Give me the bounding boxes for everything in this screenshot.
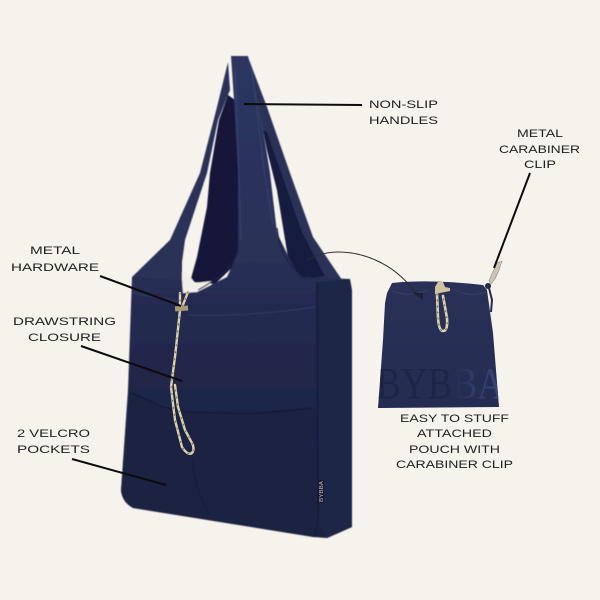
left strap interior dark xyxy=(190,95,242,284)
label: 2 velcro pockets xyxy=(17,428,91,456)
drawstring cord xyxy=(171,292,194,454)
label: easy to stuff pouch: CARABINER CLIP xyxy=(396,459,513,471)
pocket fold xyxy=(192,460,210,515)
pointer: hardware xyxy=(100,276,181,306)
left strap xyxy=(132,62,230,296)
label: metal carabiner clip: CLIP xyxy=(524,159,556,171)
pointer: pockets xyxy=(72,459,166,485)
front strap xyxy=(197,56,305,300)
label: non-slip handles: HANDLES xyxy=(369,115,439,127)
pouch cord xyxy=(437,294,447,331)
label: 2 velcro pockets: POCKETS xyxy=(17,444,91,456)
side label: BYBBA xyxy=(319,480,325,502)
tote bag xyxy=(121,56,352,538)
pointer: attachment curve xyxy=(307,252,423,300)
neckline collar xyxy=(198,228,305,290)
stitching xyxy=(235,68,273,240)
gather seam xyxy=(132,293,350,315)
label: easy to stuff pouch xyxy=(396,413,513,471)
label: metal carabiner clip xyxy=(499,128,580,171)
side label xyxy=(318,480,325,503)
side gusset xyxy=(317,279,352,538)
bag body xyxy=(121,233,352,538)
label: metal hardware xyxy=(11,245,100,274)
label: metal carabiner clip: METAL xyxy=(517,128,563,140)
right back strap xyxy=(248,57,345,284)
label: drawstring closure: CLOSURE xyxy=(28,332,102,344)
pouch gathers xyxy=(392,289,486,294)
label: non-slip handles: NON-SLIP xyxy=(369,99,438,111)
white lining xyxy=(182,272,212,298)
label: 2 velcro pockets: 2 VELCRO xyxy=(17,428,90,440)
label: metal hardware: METAL xyxy=(30,245,80,257)
pointer: carabiner xyxy=(494,173,530,268)
pointer: drawstring xyxy=(81,346,182,381)
pouch watermark: BYBBA xyxy=(376,359,504,408)
carabiner clip xyxy=(489,261,502,284)
pouch hardware xyxy=(435,282,450,294)
pouch xyxy=(376,261,504,408)
label: metal carabiner clip: CARABINER xyxy=(499,144,580,156)
label: metal hardware: HARDWARE xyxy=(11,262,100,274)
pouch body xyxy=(378,281,499,408)
label: easy to stuff pouch: POUCH WITH xyxy=(409,444,500,456)
pocket xyxy=(121,392,318,537)
label: drawstring closure xyxy=(13,316,116,344)
label: non-slip handles xyxy=(369,99,439,127)
label: drawstring closure: DRAWSTRING xyxy=(13,316,116,328)
metal hardware xyxy=(175,306,188,311)
label: easy to stuff pouch: EASY TO STUFF xyxy=(400,413,509,425)
pointer: handles xyxy=(244,104,362,105)
right back strap dark lining xyxy=(263,130,325,280)
label: easy to stuff pouch: ATTACHED xyxy=(417,428,492,440)
